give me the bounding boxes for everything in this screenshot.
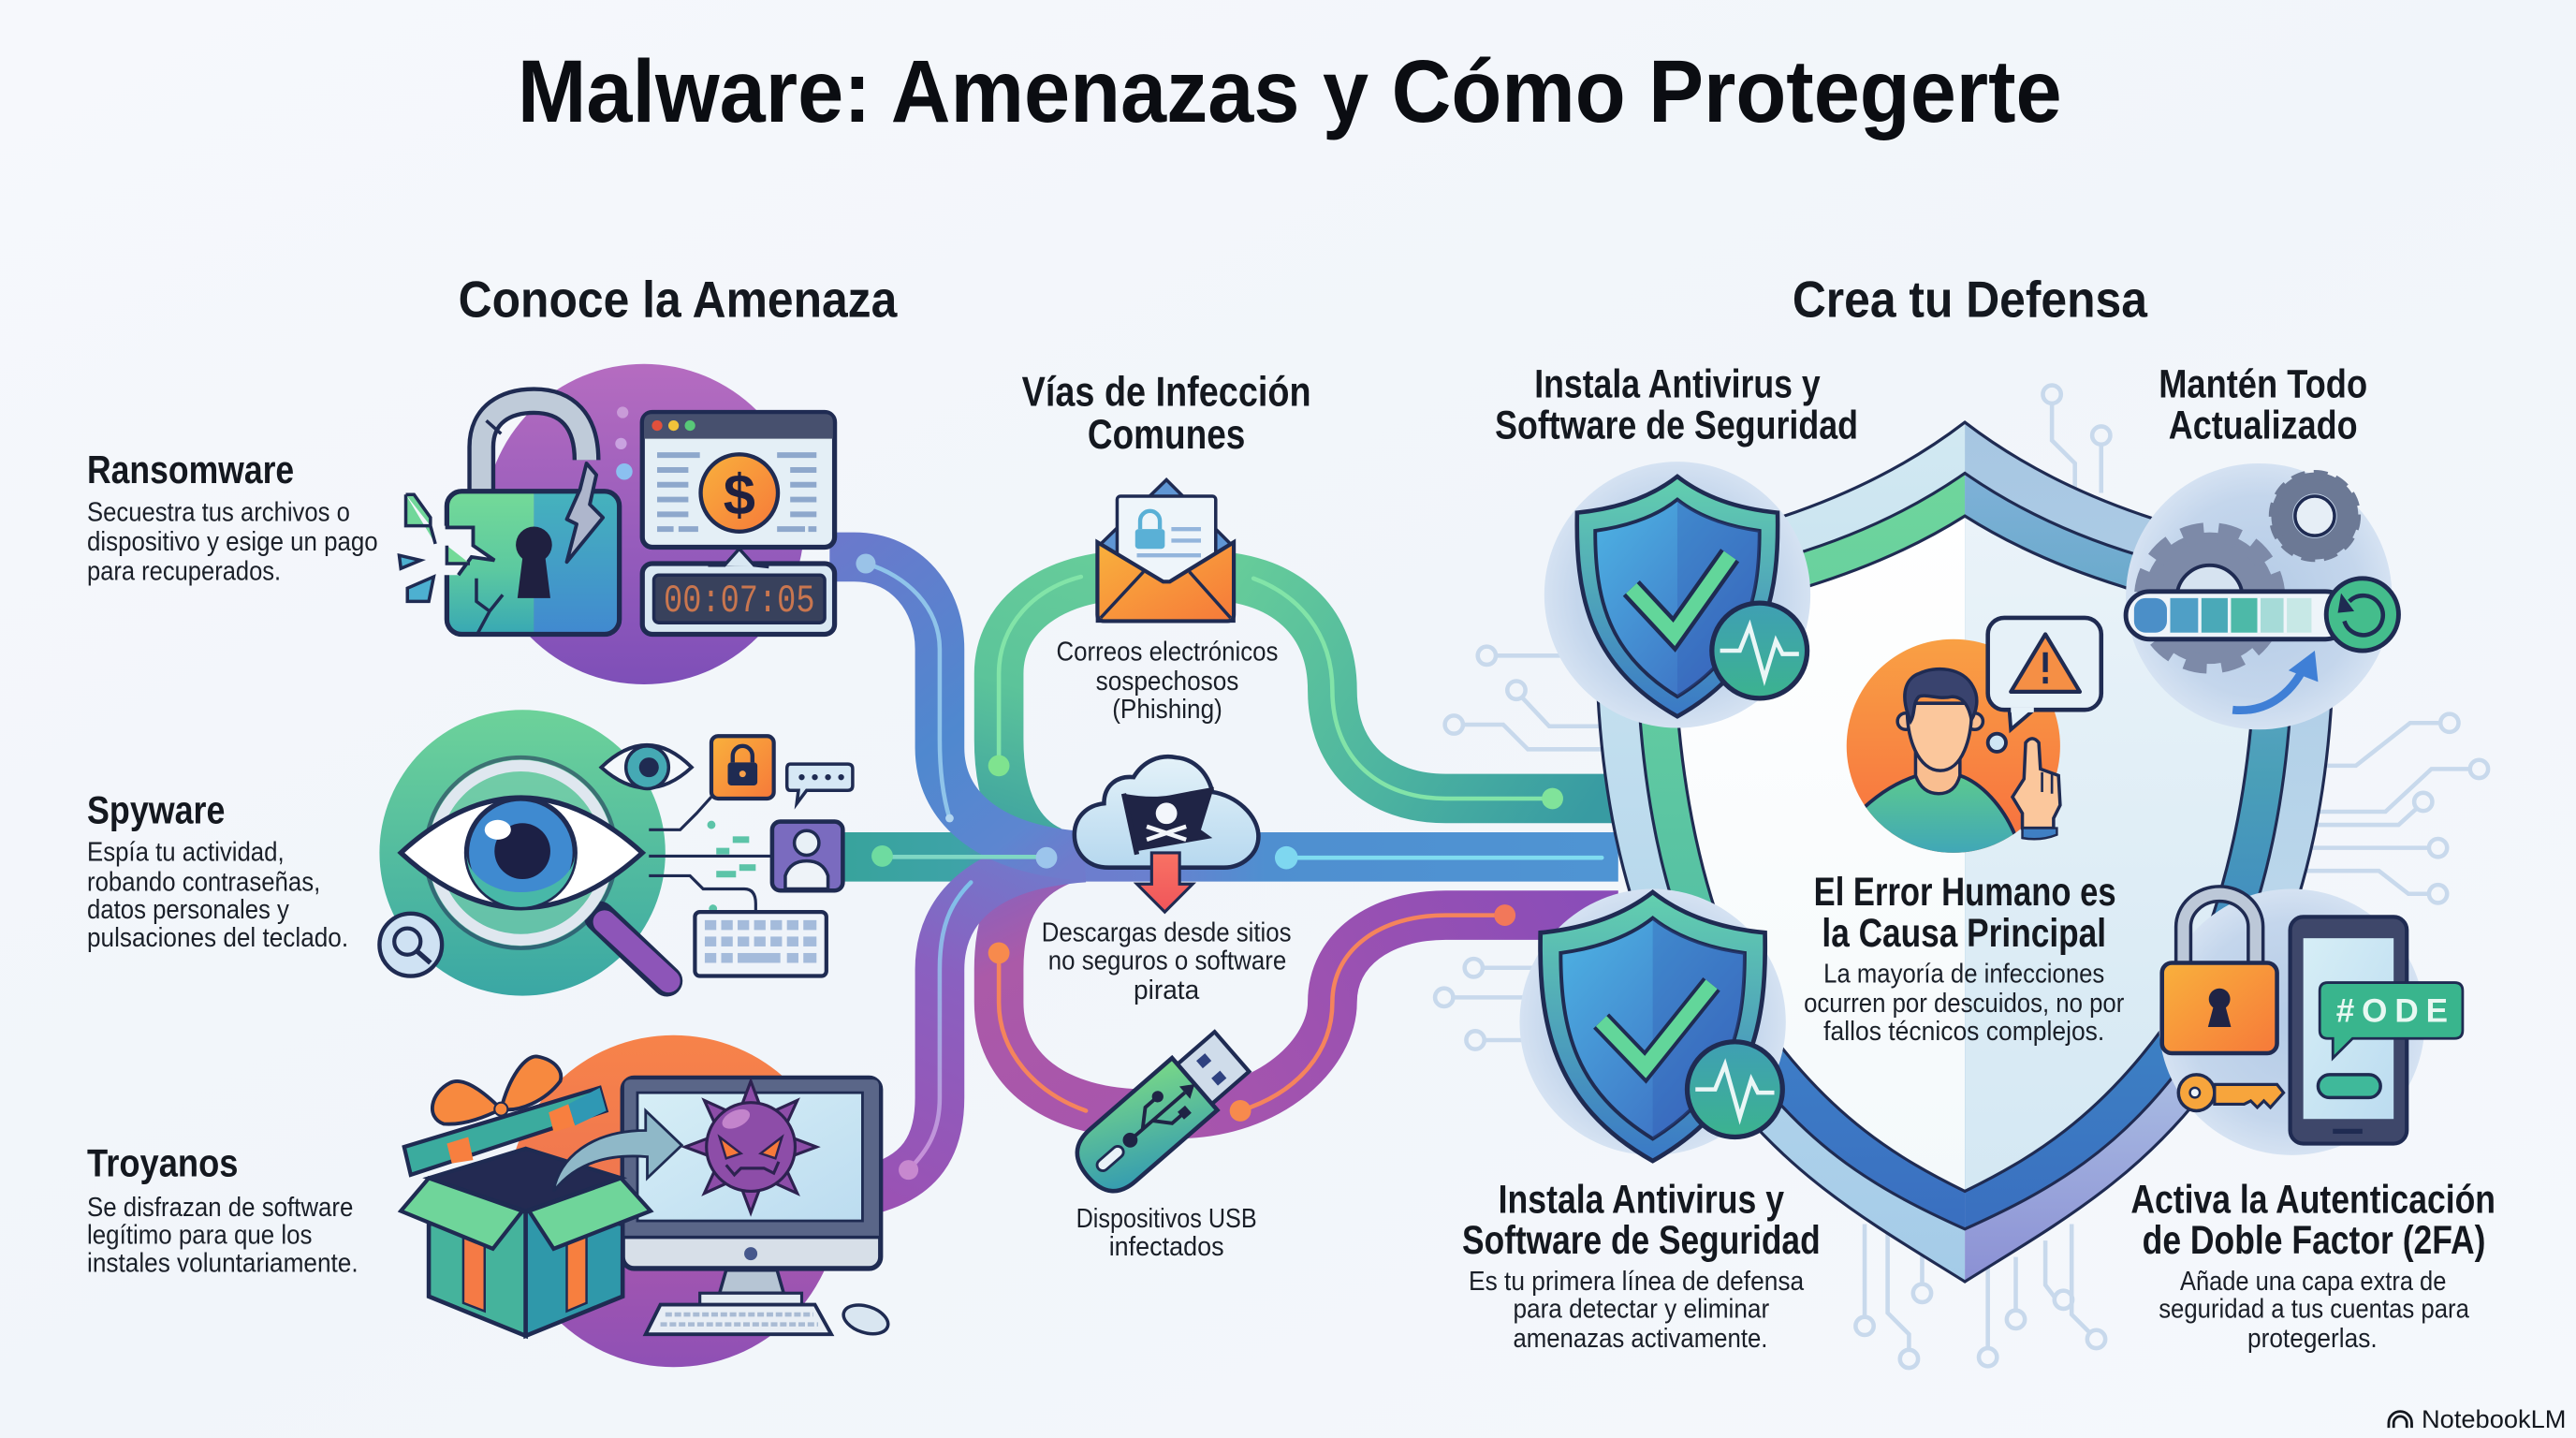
text: troyanos: legítimo para que los xyxy=(87,1221,312,1251)
text: usb: Dispositivos USB xyxy=(1076,1204,1257,1234)
text: spyware: pulsaciones del teclado. xyxy=(87,923,348,953)
text: ransomware: Secuestra tus archivos o xyxy=(87,497,350,527)
icon: antivirus top xyxy=(1544,462,1810,728)
icon: phishing envelope xyxy=(1097,479,1234,621)
text: troyanos: Se disfrazan de software xyxy=(87,1193,353,1223)
text: descargas: Descargas desde sitios xyxy=(1042,918,1292,948)
text: 2fa xyxy=(2130,1177,2496,1354)
text: usb: infectados xyxy=(1109,1232,1224,1262)
text: 2fa: protegerlas. xyxy=(2247,1324,2378,1354)
text: instala antivirus bottom: para detectar y eliminar xyxy=(1513,1295,1770,1325)
text: instala antivirus top: Software de Seguridad xyxy=(1495,404,1858,448)
heading: crea tu defensa: Crea tu Defensa xyxy=(1793,271,2148,329)
text: human error: fallos técnicos complejos. xyxy=(1823,1017,2104,1047)
text: phishing xyxy=(1057,638,1278,725)
icon: 2fa: #ODE xyxy=(2336,993,2448,1030)
text: descargas: no seguros o software xyxy=(1048,946,1286,976)
circuit traces around shield xyxy=(1435,386,2488,1368)
text: manten todo actualizado xyxy=(2159,362,2367,448)
text: spyware: Espía tu actividad, xyxy=(87,838,285,868)
heading: vias de infeccion: Vías de Infección xyxy=(1022,369,1311,416)
text: human error: la Causa Principal xyxy=(1822,911,2106,956)
text: phishing: sospechosos xyxy=(1096,667,1238,697)
text: phishing: Correos electrónicos xyxy=(1057,638,1278,668)
text: instala antivirus top: Instala Antivirus y xyxy=(1534,362,1821,407)
icon: ransomware: $ xyxy=(724,462,755,527)
icon: update xyxy=(2126,463,2398,729)
text: troyanos: instales voluntariamente. xyxy=(87,1248,359,1278)
icon: trojan xyxy=(401,1035,892,1367)
text: human error: ocurren por descuidos, no por xyxy=(1804,989,2125,1019)
icon: ransomware: 00:07:05 xyxy=(664,579,815,624)
text: ransomware: Ransomware xyxy=(87,448,294,492)
text: ransomware: dispositivo y esige un pago xyxy=(87,527,378,557)
heading: vias de infeccion xyxy=(1022,369,1311,458)
text: phishing: (Phishing) xyxy=(1112,695,1222,725)
text: instala antivirus top xyxy=(1495,362,1858,448)
text: spyware: Spyware xyxy=(87,788,225,831)
text: spyware: datos personales y xyxy=(87,895,289,925)
text: ransomware: para recuperados. xyxy=(87,557,281,587)
text: troyanos: Troyanos xyxy=(87,1142,238,1185)
heading: conoce la amenaza: Conoce la Amenaza xyxy=(459,271,898,329)
text: spyware: robando contraseñas, xyxy=(87,867,320,897)
icon: spyware xyxy=(379,710,853,996)
text: instala antivirus bottom xyxy=(1462,1177,1821,1354)
icon: human error xyxy=(1847,618,2101,871)
text: manten todo actualizado: Mantén Todo xyxy=(2159,362,2367,407)
text: 2fa: de Doble Factor (2FA) xyxy=(2143,1218,2485,1263)
icon: 2fa xyxy=(2159,889,2463,1155)
text: ransomware xyxy=(87,448,378,587)
text: descargas xyxy=(1042,918,1292,1005)
text: human error: El Error Humano es xyxy=(1814,870,2116,915)
heading: vias de infeccion: Comunes xyxy=(1088,411,1245,458)
infection pipes xyxy=(829,557,1618,1190)
text: instala antivirus bottom: Software de Seguridad xyxy=(1462,1218,1821,1263)
pipe highlights xyxy=(856,553,1602,1180)
text: human error xyxy=(1804,870,2125,1047)
icon: antivirus bottom xyxy=(1519,889,1786,1161)
text: instala antivirus bottom: amenazas activamente. xyxy=(1513,1324,1767,1354)
title: Malware: Amenazas y Cómo Protegerte xyxy=(518,42,2062,141)
icon: usb drive xyxy=(1065,1026,1254,1203)
text: spyware xyxy=(87,788,348,953)
text: usb xyxy=(1076,1204,1257,1262)
text: 2fa: Activa la Autenticación xyxy=(2130,1177,2496,1222)
text: instala antivirus bottom: Instala Antivirus y xyxy=(1499,1177,1784,1222)
text: instala antivirus bottom: Es tu primera línea de defensa xyxy=(1469,1267,1805,1297)
text: 2fa: seguridad a tus cuentas para xyxy=(2159,1295,2470,1325)
icon: cloud with pirate flag xyxy=(1075,756,1258,912)
notebooklm watermark: NotebookLM xyxy=(2422,1404,2566,1433)
text: descargas: pirata xyxy=(1134,976,1200,1005)
text: troyanos xyxy=(87,1142,359,1278)
text: human error: La mayoría de infecciones xyxy=(1823,960,2104,990)
icon: ransomware xyxy=(399,364,835,684)
shield xyxy=(1596,422,2334,1282)
text: manten todo actualizado: Actualizado xyxy=(2169,404,2358,448)
text: 2fa: Añade una capa extra de xyxy=(2180,1267,2446,1297)
